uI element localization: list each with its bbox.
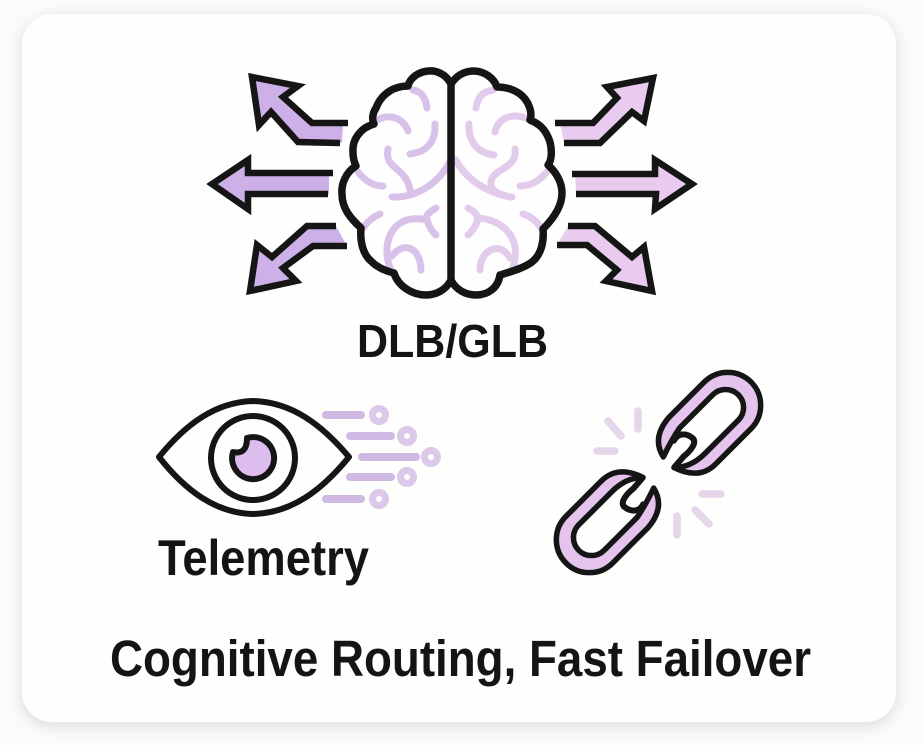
- telemetry data streams: [326, 408, 438, 506]
- arrow: upper right: [555, 76, 656, 143]
- arrow: middle left: [212, 160, 333, 209]
- brain silhouette fill: [342, 71, 562, 295]
- caption: Cognitive Routing, Fast Failover: Cognitive Routing, Fast Failover: [110, 630, 811, 687]
- label: Telemetry: Telemetry: [158, 530, 369, 586]
- stream nodes: [372, 408, 438, 506]
- brain outline: [342, 71, 562, 295]
- iris ring: [211, 416, 295, 500]
- arrow: lower right: [557, 226, 654, 293]
- heading: DLB/GLB: DLB/GLB: [357, 315, 548, 367]
- icon: broken chain: [543, 359, 774, 586]
- stream lines: [326, 415, 416, 499]
- brain folds: left hemisphere: [358, 90, 449, 270]
- arrow: upper left: [248, 75, 348, 143]
- arrow: lower left: [248, 226, 347, 293]
- break sparks: [597, 411, 721, 535]
- eye outline: [159, 401, 349, 514]
- arrow: middle right: [572, 157, 697, 212]
- upper chain link: [646, 359, 774, 487]
- icon: eye: [159, 401, 349, 514]
- icon: brain: [342, 71, 562, 295]
- lower chain link: [543, 458, 671, 586]
- pupil with highlight notch: [232, 437, 274, 479]
- brain folds: right hemisphere: [456, 90, 547, 270]
